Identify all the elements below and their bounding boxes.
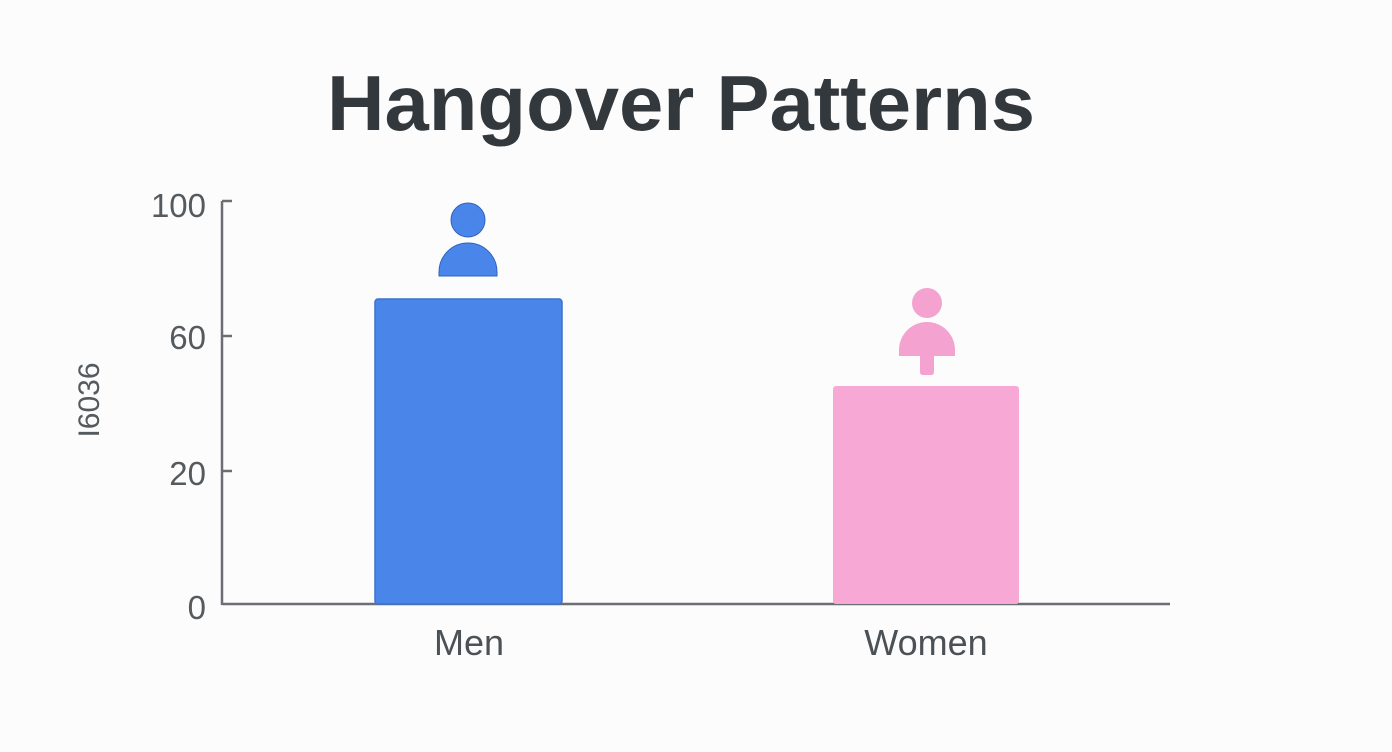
- icon: woman: [899, 288, 955, 375]
- icon: man: [439, 203, 497, 276]
- tick labels: [151, 187, 206, 626]
- bar: women: [833, 386, 1019, 604]
- tick labels: 20: [169, 455, 206, 492]
- tick labels: 100: [151, 187, 206, 224]
- x axis: [222, 603, 1170, 605]
- title: Hangover Patterns: [327, 59, 1035, 147]
- tick labels: 60: [169, 319, 206, 356]
- y axis label: I6036: [73, 362, 106, 438]
- tick labels: 0: [188, 589, 206, 626]
- x labels: Men: [434, 622, 504, 663]
- bar: men: [375, 299, 562, 604]
- text: Women: [864, 622, 988, 663]
- y axis: [151, 187, 232, 626]
